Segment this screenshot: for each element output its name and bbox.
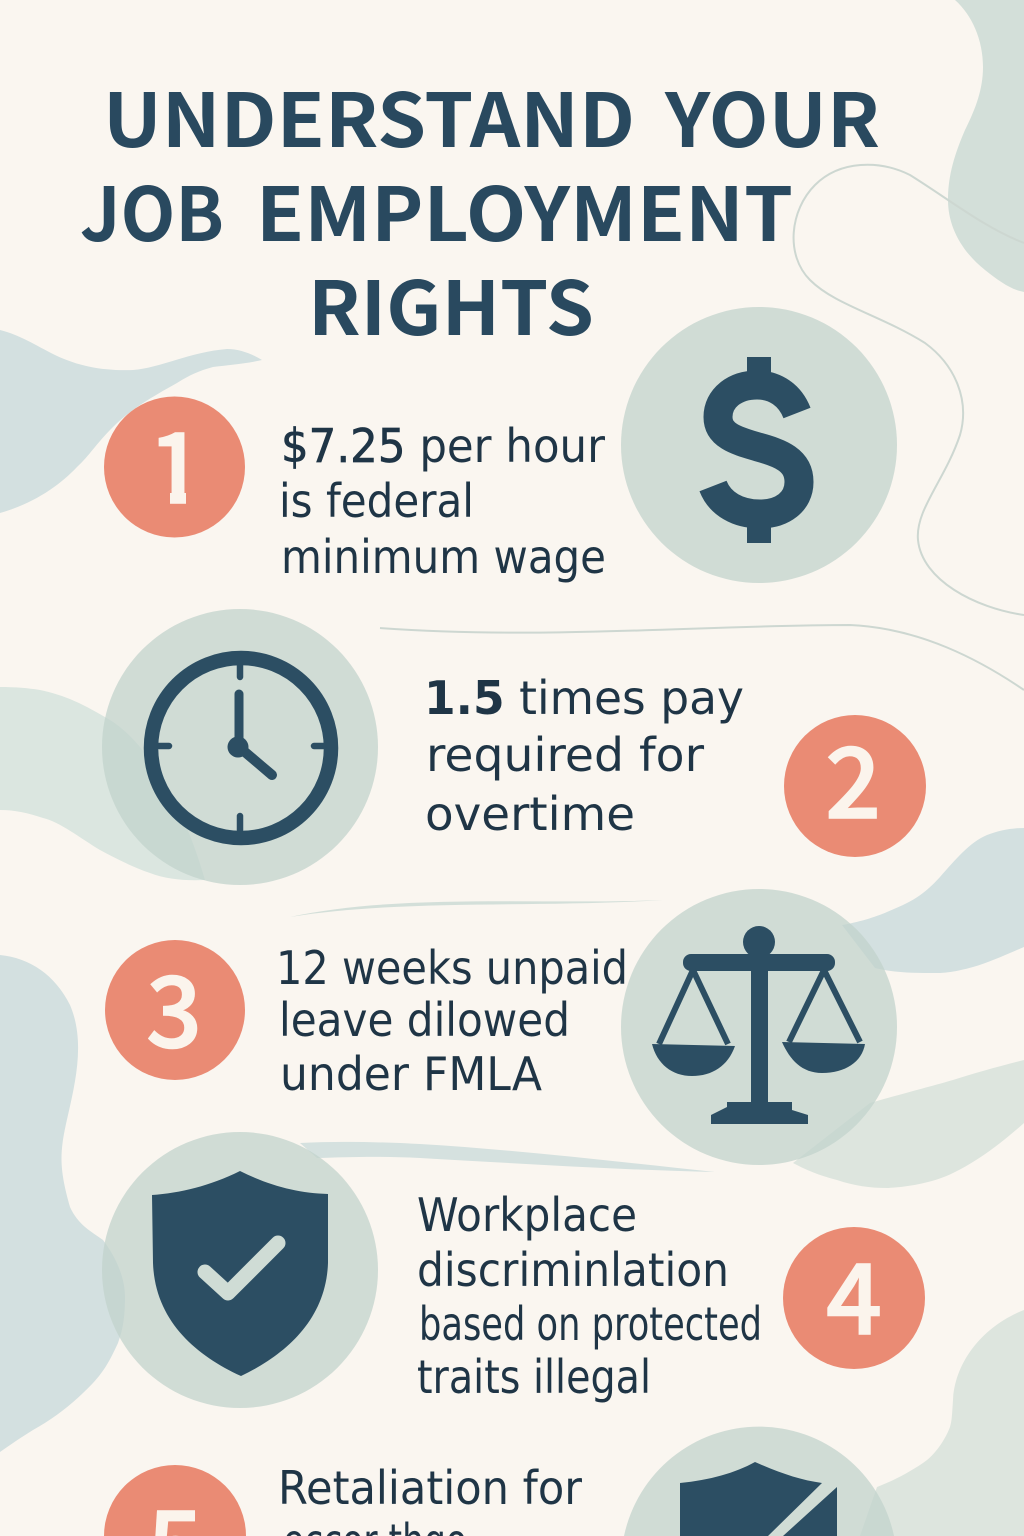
text: FMLA leave: leave dilowed (279, 993, 570, 1047)
text: discrimination: discriminlation (417, 1243, 729, 1297)
text: FMLA leave: 12 weeks unpaid (276, 941, 628, 995)
text: retaliation (278, 1461, 582, 1536)
text: overtime: 1.5 times pay (424, 671, 744, 725)
number badge 1 (104, 390, 245, 538)
number badge 2 (784, 705, 926, 857)
title: YOUR (664, 62, 880, 169)
item 5: retaliation (104, 1427, 894, 1536)
title (80, 62, 880, 357)
text: minimum wage: is federal (279, 474, 474, 528)
number badge 4: 4 (826, 1221, 882, 1363)
icon: dollar sign (621, 307, 897, 583)
title: RIGHTS (308, 250, 594, 357)
item 2: overtime (102, 609, 926, 885)
icon: shield with check (102, 1132, 378, 1408)
icon: shield with slash (624, 1427, 894, 1536)
text: FMLA leave (276, 941, 628, 1101)
number badge 3: 3 (146, 934, 202, 1076)
item 4: discrimination (102, 1132, 925, 1408)
text: discrimination: traits illegal (417, 1350, 651, 1404)
text: minimum wage (279, 419, 606, 584)
text: retaliation: Retaliation for (278, 1461, 582, 1515)
text: overtime: overtime (425, 787, 635, 841)
text: discrimination (417, 1188, 762, 1404)
icon: scales of justice (621, 889, 897, 1165)
number badge 5 (104, 1465, 246, 1536)
text: minimum wage: $7.25 per hour (281, 419, 605, 473)
title: JOB (80, 156, 224, 263)
text: discrimination: based on protected (419, 1297, 762, 1351)
item 1: minimum wage (104, 307, 897, 584)
number badge 3 (105, 934, 245, 1080)
number badge 4 (783, 1221, 925, 1369)
text: discrimination: Workplace (417, 1188, 637, 1242)
text: overtime: required for (426, 728, 704, 782)
item 3: FMLA leave (105, 889, 897, 1165)
number badge 1: 1 (148, 390, 204, 532)
text: FMLA leave: under FMLA (280, 1047, 542, 1101)
title: UNDERSTAND (103, 62, 635, 169)
number badge 2: 2 (825, 705, 881, 847)
icon: clock (102, 609, 378, 885)
text: overtime (424, 671, 744, 841)
text: minimum wage: minimum wage (281, 530, 606, 584)
title: EMPLOYMENT (256, 156, 793, 263)
